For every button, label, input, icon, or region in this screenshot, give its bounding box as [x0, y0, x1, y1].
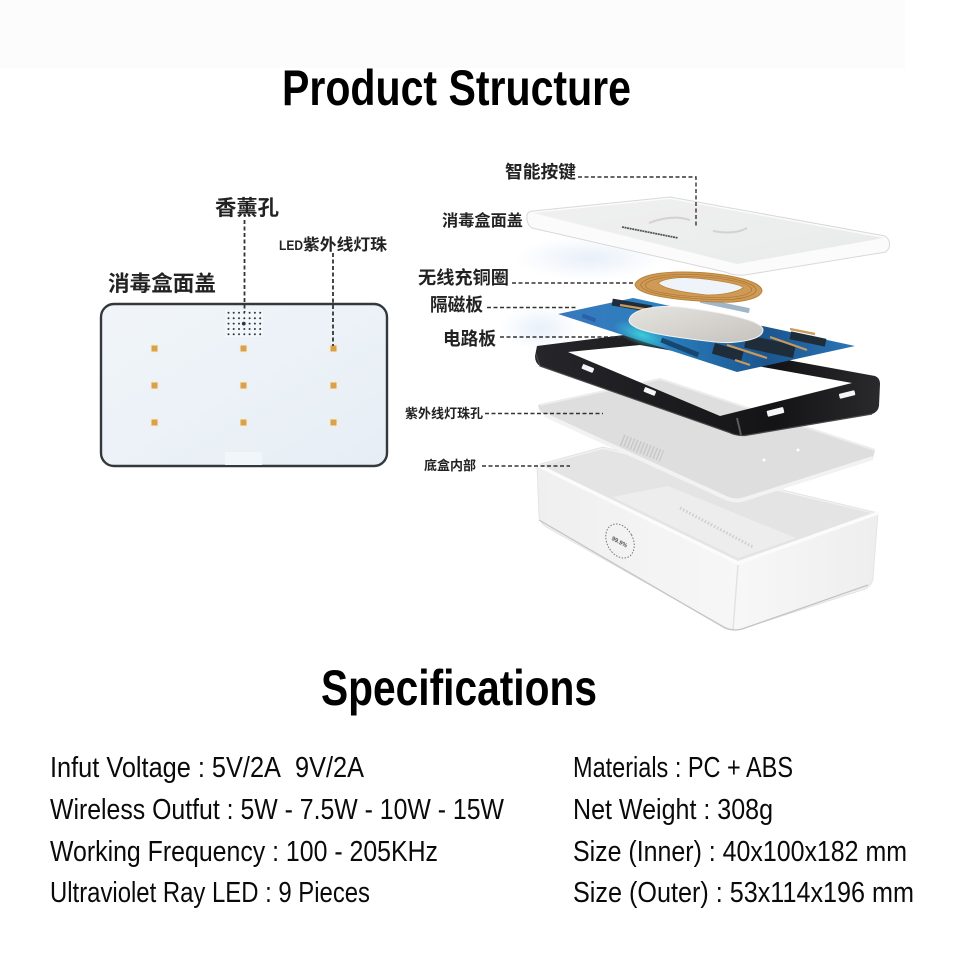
text block: specifications left column: Infut Voltage : 5V/2A 9V/2A — [50, 752, 365, 784]
UV tray — [538, 378, 875, 500]
label: LED紫外线灯珠 — [279, 235, 387, 254]
label: 无线充铜圈: 无线充铜圈 — [418, 267, 509, 288]
text block: specifications left column: Ultraviolet Ray LED : 9 Pieces — [50, 877, 370, 909]
title: Product Structure: Product Structure — [282, 60, 631, 116]
label: 底盒内部: 底盒内部 — [424, 458, 476, 473]
aroma holes — [225, 310, 263, 337]
label: 消毒盒面盖: 消毒盒面盖 — [108, 271, 216, 296]
label: 电路板: 电路板 — [443, 329, 496, 349]
panel: exploded view — [405, 162, 890, 630]
label: LED紫外线灯珠: 紫外线灯珠 — [303, 235, 387, 254]
text block: specifications left column: Wireless Outfut : 5W - 7.5W - 10W - 15W — [50, 794, 505, 826]
seal 99.9%: 99.9% — [610, 536, 629, 550]
shield plate — [629, 306, 763, 342]
label: LED紫外线灯珠: LED — [279, 238, 303, 253]
bottom tab — [225, 452, 262, 465]
text block: specifications left column — [50, 752, 505, 909]
label: 香薰孔: 香薰孔 — [215, 197, 279, 220]
label: 隔磁板: 隔磁板 — [430, 295, 483, 315]
LED grid — [151, 345, 337, 426]
faint blue reflections — [500, 236, 665, 350]
base box — [537, 447, 878, 630]
label: 消毒盒面盖: 消毒盒面盖 — [442, 211, 523, 230]
text block: specifications right column: Size (Inner) : 40x100x182 mm — [573, 836, 907, 868]
panel: lid inner view — [101, 197, 387, 466]
lid card — [101, 304, 387, 466]
copper coil — [635, 272, 762, 302]
black frame — [535, 333, 880, 436]
label: 紫外线灯珠孔: 紫外线灯珠孔 — [405, 406, 483, 421]
text block: specifications right column: Materials : PC + ABS — [573, 752, 793, 784]
leader lines — [482, 177, 696, 466]
text block: specifications right column: Net Weight : 308g — [573, 794, 773, 826]
label: 智能按键: 智能按键 — [505, 162, 577, 182]
text block: specifications left column: Working Frequency : 100 - 205KHz — [50, 836, 438, 868]
text block: specifications right column — [573, 752, 914, 909]
frame slots — [581, 364, 855, 417]
text block: specifications right column: Size (Outer) : 53x114x196 mm — [573, 877, 914, 909]
top lid — [527, 197, 890, 275]
top band — [0, 0, 905, 68]
circuit board — [558, 298, 855, 372]
leader lines — [244, 220, 333, 346]
heading: Specifications: Specifications — [321, 660, 597, 716]
seal 99.9% — [600, 519, 640, 563]
